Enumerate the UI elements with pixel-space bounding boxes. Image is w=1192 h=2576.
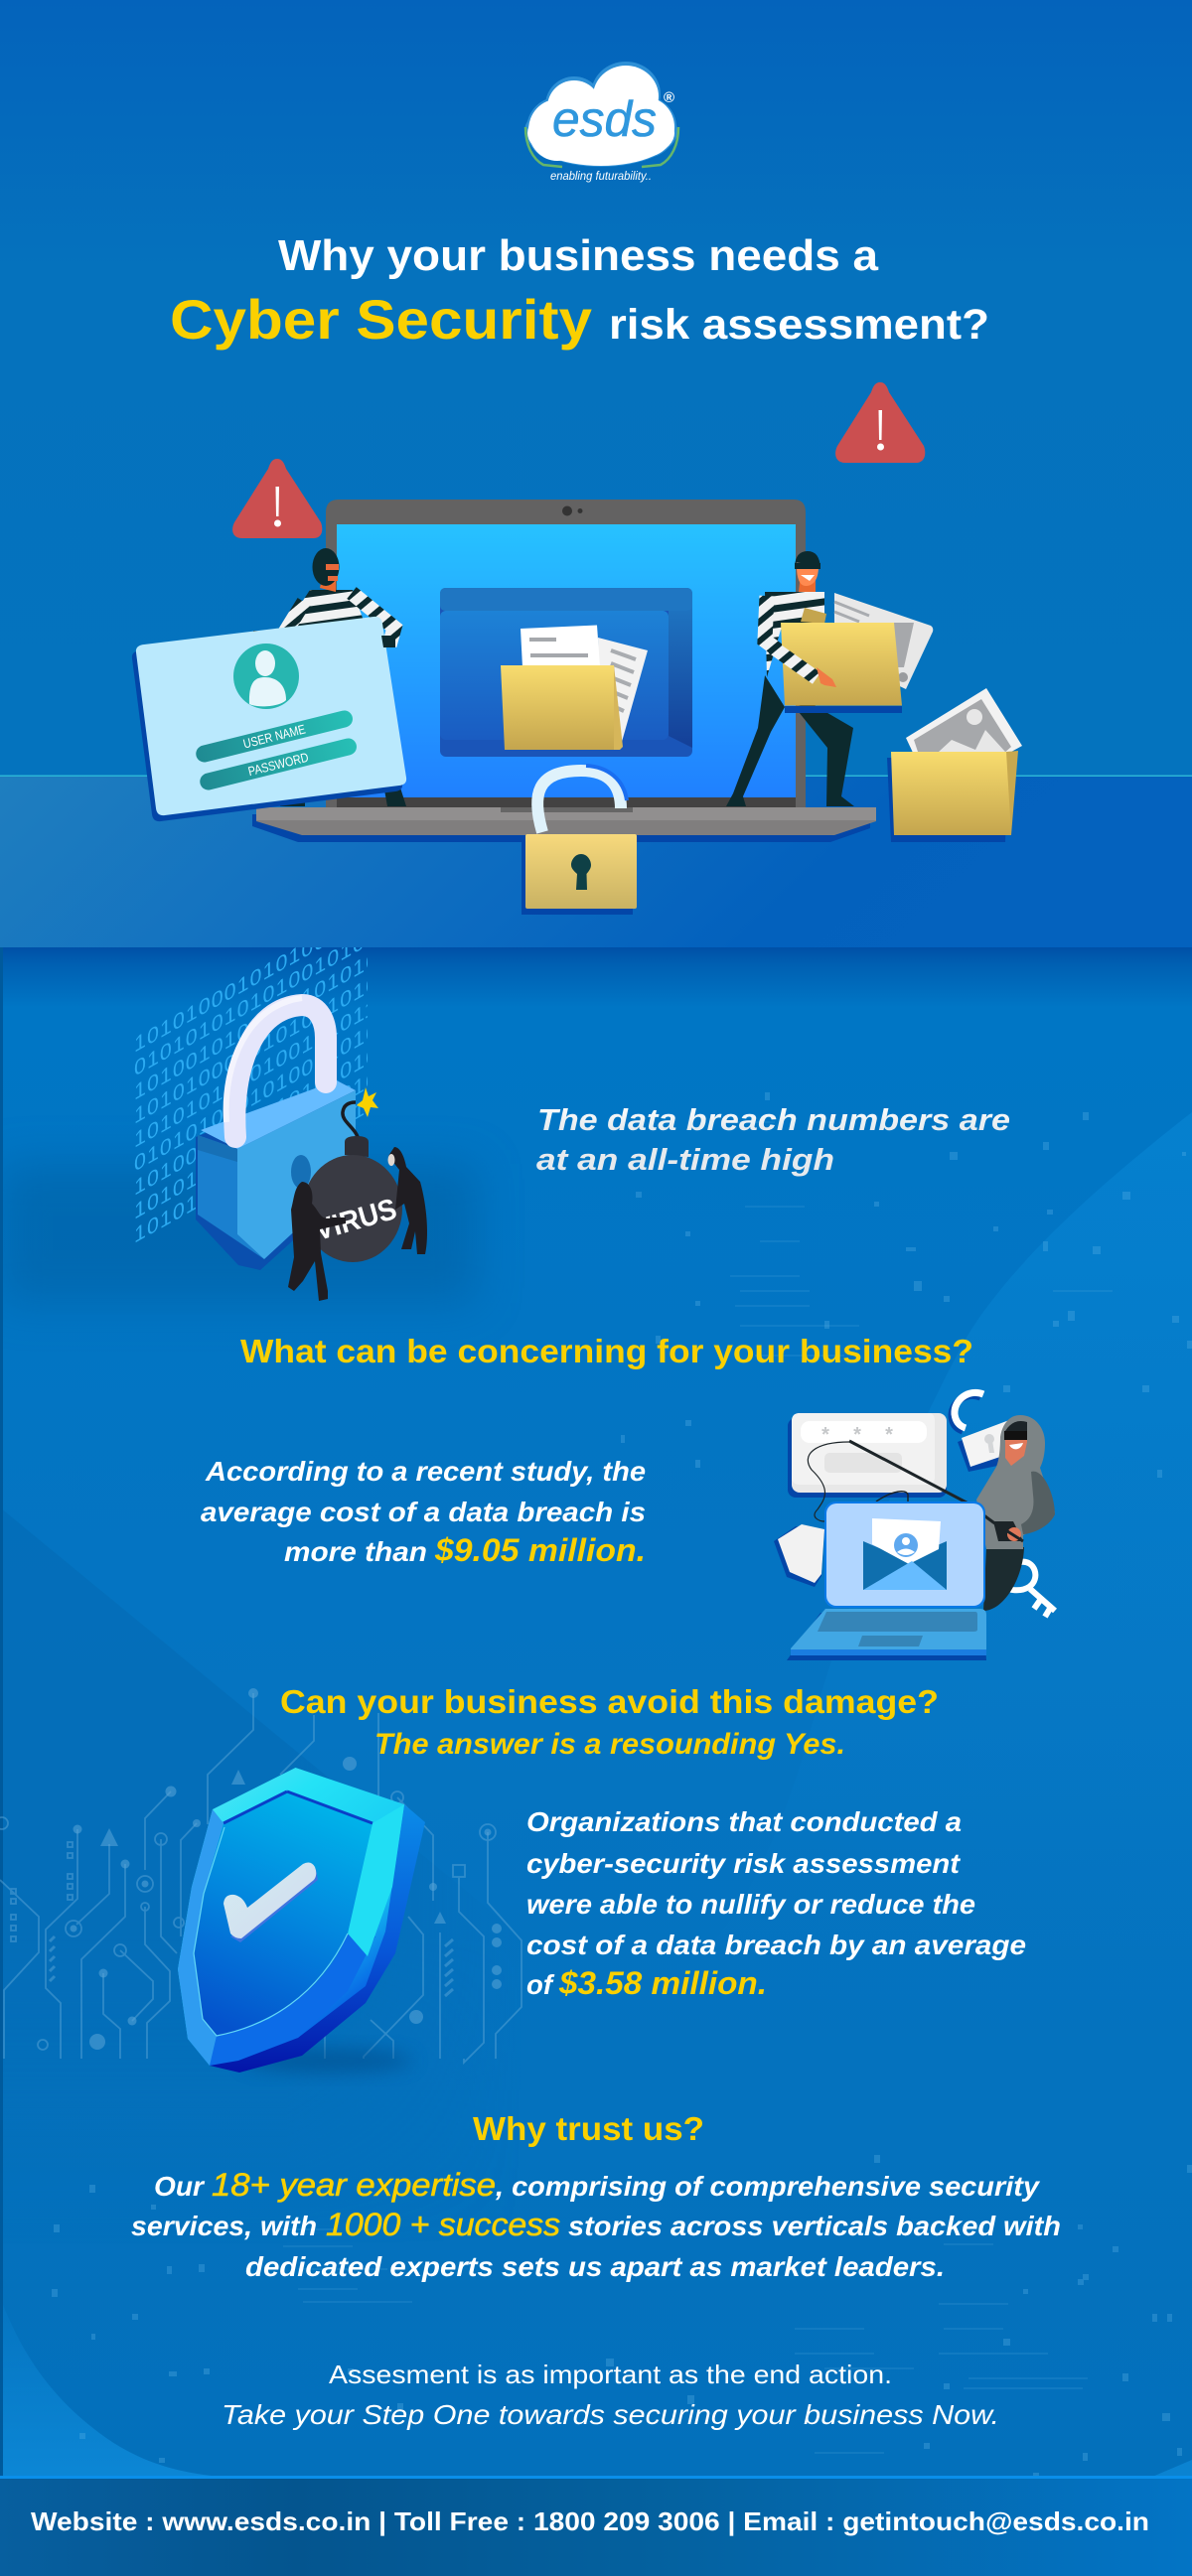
folder held <box>785 706 902 713</box>
window panel on laptop screen <box>440 588 692 757</box>
section 2 illustration: padlock and virus bomb <box>135 947 427 1301</box>
shield side <box>210 1804 425 2073</box>
envelope <box>863 1541 947 1590</box>
circuit board nodes <box>70 1688 502 2050</box>
password window <box>788 1413 947 1498</box>
heading: why trust us: Why trust us? <box>473 2110 704 2147</box>
password field: PASSWORD <box>246 750 310 779</box>
binary code wall: 10101010101001010110101101 <box>134 943 466 1153</box>
password window: * <box>821 1424 829 1446</box>
logo: cloud <box>524 62 677 167</box>
text: organizations: of <box>526 1969 555 2000</box>
padlock <box>196 998 356 1270</box>
text: organizations: cyber-security risk assessment <box>526 1848 962 1879</box>
password field <box>198 737 359 791</box>
background: top section <box>0 0 1192 777</box>
binary code wall: 10101000101010010101010101 <box>134 1013 469 1224</box>
icon: alert triangle left <box>232 459 322 538</box>
open padlock behind hacker <box>952 1392 1017 1472</box>
headline: data breach: The data breach numbers are <box>537 1102 1010 1137</box>
headline: data breach <box>536 1102 1010 1177</box>
heading: avoid damage: Can your business avoid this damage? <box>280 1683 939 1720</box>
logo: hands <box>525 127 678 167</box>
logo <box>524 62 678 183</box>
binary code wall: 10100101010001010101010001 <box>134 894 469 1105</box>
headline: data breach: at an all-time high <box>536 1142 834 1177</box>
text: expertise: Our <box>154 2171 206 2202</box>
logo: wordmark: esds <box>552 91 657 147</box>
virus bomb: VIRUS <box>311 1193 400 1247</box>
shield rim <box>178 1768 404 2066</box>
shield with check mark <box>178 1768 425 2073</box>
binary code wall: 01010101010100010101010001 <box>134 965 469 1177</box>
text: expertise: 1000 + success <box>326 2207 560 2242</box>
text: average cost: more than <box>284 1536 427 1567</box>
thief carrying folder <box>726 551 933 806</box>
laptop with email <box>787 1502 986 1660</box>
logo: tagline: enabling futurability.. <box>550 171 652 183</box>
text: call to action: Take your Step One towards securing your business Now. <box>222 2399 999 2430</box>
shield face <box>194 1791 372 2036</box>
open padlock <box>522 766 637 915</box>
text: organizations: $3.58 million. <box>558 1965 767 2001</box>
heading: avoid damage <box>280 1683 939 1761</box>
text: expertise: dedicated experts sets us apart as market leaders. <box>245 2251 945 2282</box>
heading: concerning: What can be concerning for your business? <box>240 1333 973 1369</box>
title: Why your business needs a <box>278 231 879 280</box>
text: average cost: $9.05 million. <box>434 1532 646 1568</box>
virus bomb <box>303 1087 402 1262</box>
text: call to action: Assesment is as important as the end action. <box>329 2360 892 2389</box>
key <box>1009 1562 1055 1617</box>
laptop <box>252 500 876 842</box>
text: expertise: stories across verticals backed with <box>568 2211 1061 2241</box>
hacker silhouettes <box>288 1147 427 1301</box>
text: average cost: According to a recent study, the <box>205 1456 646 1487</box>
binary code wall: 01010101010100101010110101 <box>134 871 467 1081</box>
text: expertise: 18+ year expertise <box>212 2167 496 2203</box>
text: average cost <box>201 1456 646 1568</box>
text: average cost: average cost of a data breach is <box>201 1497 646 1527</box>
password window: * <box>853 1424 861 1446</box>
logo: registered mark: ® <box>664 89 674 106</box>
binary code wall: 10100101000101010101010100 <box>134 989 469 1201</box>
footer contact text: Website : www.esds.co.in | Toll Free : 1800 209 3006 | Email : getintouch@esds.co.in <box>31 2506 1149 2536</box>
folder with photo <box>887 688 1022 842</box>
text: organizations: cost of a data breach by an average <box>526 1930 1026 1960</box>
icon: alert triangle right <box>835 382 925 463</box>
card behind folder <box>834 593 933 689</box>
title: risk assessment? <box>609 301 989 349</box>
background: middle section <box>0 946 1192 2477</box>
binary code wall: 10101010101010100101010101 <box>134 1037 469 1248</box>
binary code wall: 10101000101010010101010100 <box>134 918 469 1129</box>
footer bar <box>0 2476 1192 2576</box>
password window: * <box>885 1424 893 1446</box>
hero illustration <box>132 382 1022 915</box>
binary code wall: 10101000101010001011010110 <box>134 848 466 1058</box>
binary code wall <box>135 947 368 1242</box>
text: expertise: , comprising of comprehensive security <box>495 2171 1040 2202</box>
background: faint code lines <box>278 1122 1113 2453</box>
heading: avoid damage: The answer is a resounding Yes. <box>374 1728 845 1761</box>
login card <box>132 617 406 821</box>
fishing rod <box>808 1441 1023 1541</box>
text: expertise <box>131 2167 1061 2282</box>
bottom band of hero section <box>0 775 1192 947</box>
thief with login card <box>132 548 406 821</box>
title: Cyber Security <box>170 288 592 351</box>
phishing illustration <box>774 1392 1055 1660</box>
text: organizations: Organizations that conducted a <box>526 1806 962 1837</box>
text: call to action <box>222 2360 999 2430</box>
text: organizations <box>526 1806 1026 2001</box>
user name field <box>194 709 355 764</box>
torn paper <box>774 1526 824 1587</box>
check mark <box>224 1863 318 1942</box>
text: organizations: were able to nullify or reduce the <box>526 1889 975 1920</box>
avatar <box>233 644 299 709</box>
folder with documents <box>501 626 648 750</box>
background: particles <box>52 1092 1192 2477</box>
user name field: USER NAME <box>241 721 307 752</box>
text: expertise: services, with <box>131 2211 317 2241</box>
hacker <box>976 1415 1055 1611</box>
background: circuit board behind the shield <box>0 1693 522 2063</box>
title <box>170 231 989 351</box>
